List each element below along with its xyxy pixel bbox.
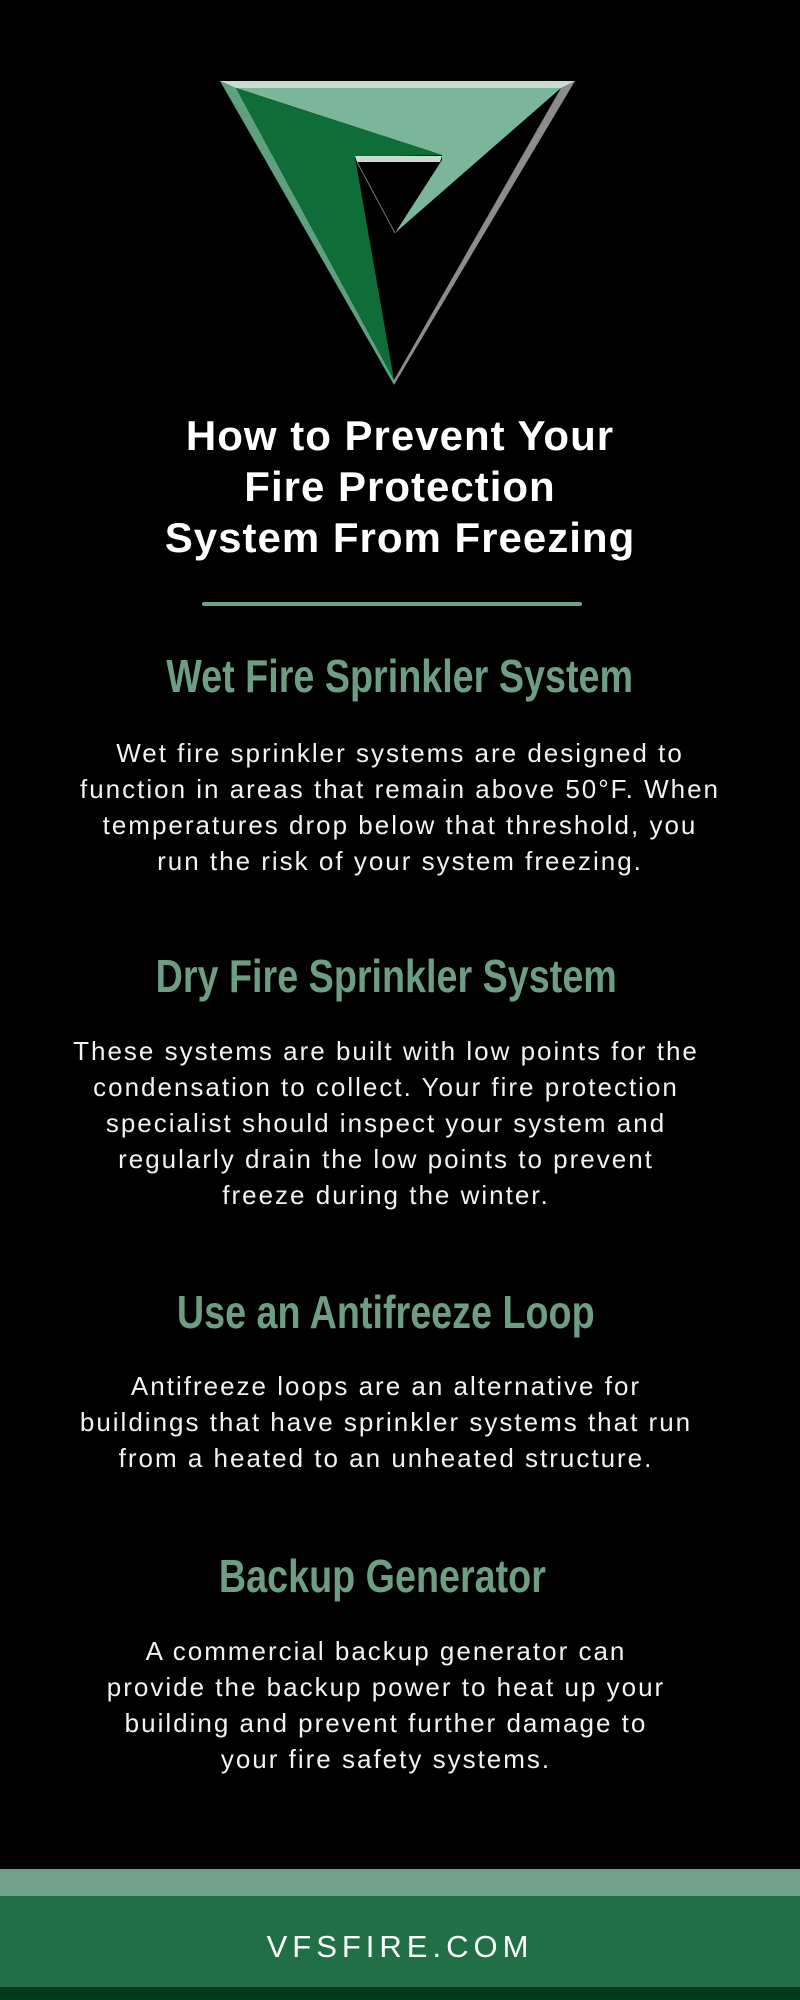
text: antifreeze: Antifreeze loops are an alternative for <box>131 1371 641 1401</box>
heading: wet: Wet Fire Sprinkler System <box>167 650 633 702</box>
heading: antifreeze: Use an Antifreeze Loop <box>177 1286 595 1338</box>
title <box>165 412 635 561</box>
text: wet <box>80 738 720 876</box>
footer text: VFSFIRE.COM <box>267 1929 533 1964</box>
text: dry: specialist should inspect your system and <box>106 1108 666 1138</box>
footer <box>0 1869 800 2000</box>
text: dry: regularly drain the low points to prevent <box>118 1144 654 1174</box>
text: generator: your fire safety systems. <box>221 1744 551 1774</box>
text: generator: provide the backup power to heat up your <box>107 1672 665 1702</box>
text: wet: function in areas that remain above 50°F. When <box>80 774 720 804</box>
title: Fire Protection <box>244 463 556 510</box>
text: dry: condensation to collect. Your fire protection <box>93 1072 679 1102</box>
text: antifreeze: buildings that have sprinkler systems that run <box>80 1407 692 1437</box>
text: dry: These systems are built with low points for the <box>73 1036 699 1066</box>
heading: dry: Dry Fire Sprinkler System <box>155 950 617 1002</box>
divider <box>202 602 582 606</box>
text: antifreeze <box>80 1371 692 1473</box>
text: dry <box>73 1036 699 1210</box>
text: antifreeze: from a heated to an unheated structure. <box>119 1443 653 1473</box>
logo: triangle <box>220 81 575 385</box>
text: dry: freeze during the winter. <box>222 1180 550 1210</box>
text: wet: Wet fire sprinkler systems are designed to <box>116 738 684 768</box>
title: System From Freezing <box>165 514 635 561</box>
title: How to Prevent Your <box>186 412 614 459</box>
text: wet: run the risk of your system freezing. <box>157 846 643 876</box>
text: generator: A commercial backup generator can <box>146 1636 626 1666</box>
heading: generator: Backup Generator <box>218 1550 545 1602</box>
text: generator: building and prevent further damage to <box>125 1708 647 1738</box>
text: wet: temperatures drop below that threshold, you <box>103 810 697 840</box>
text: generator <box>107 1636 665 1774</box>
